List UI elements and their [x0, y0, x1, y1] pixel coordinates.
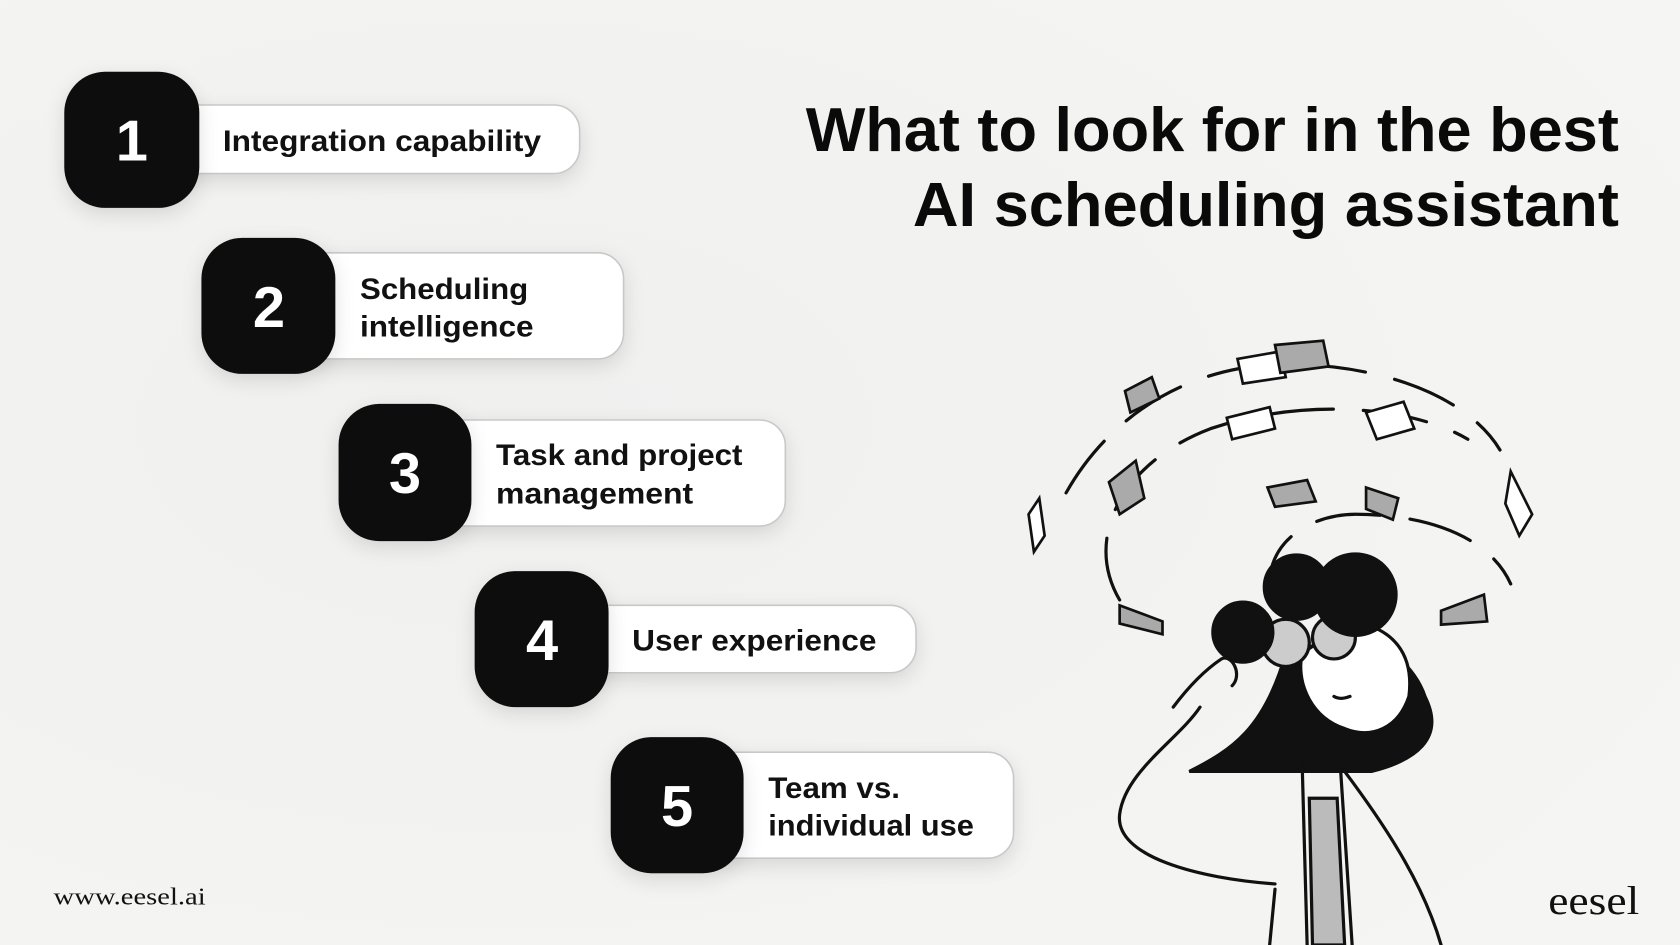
- item 3: Task and project: [496, 439, 743, 472]
- item 2: Scheduling: [360, 273, 528, 306]
- item 5: [611, 737, 1014, 873]
- illustration: overwhelmed woman with flying papers: [1029, 341, 1532, 945]
- title: AI scheduling assistant: [913, 171, 1619, 240]
- item 1: Integration capability: [223, 125, 541, 158]
- item 4: [475, 571, 916, 707]
- item 2: 2: [253, 276, 285, 340]
- item 2: intelligence: [360, 310, 534, 343]
- item 3: [339, 404, 785, 541]
- footer logo: eesel: [1548, 878, 1639, 923]
- footer url: www.eesel.ai: [54, 883, 206, 910]
- item 5: individual use: [768, 810, 974, 843]
- item 4: 4: [526, 609, 558, 673]
- item 1: [64, 72, 580, 208]
- item 5: Team vs.: [768, 772, 900, 805]
- item 4: User experience: [632, 624, 876, 657]
- item 5: 5: [661, 775, 693, 839]
- item 2: [201, 238, 624, 374]
- item 3: management: [496, 478, 693, 511]
- item 1: 1: [116, 110, 148, 174]
- title: [806, 96, 1619, 240]
- item 3: 3: [389, 442, 421, 506]
- title: What to look for in the best: [806, 96, 1619, 165]
